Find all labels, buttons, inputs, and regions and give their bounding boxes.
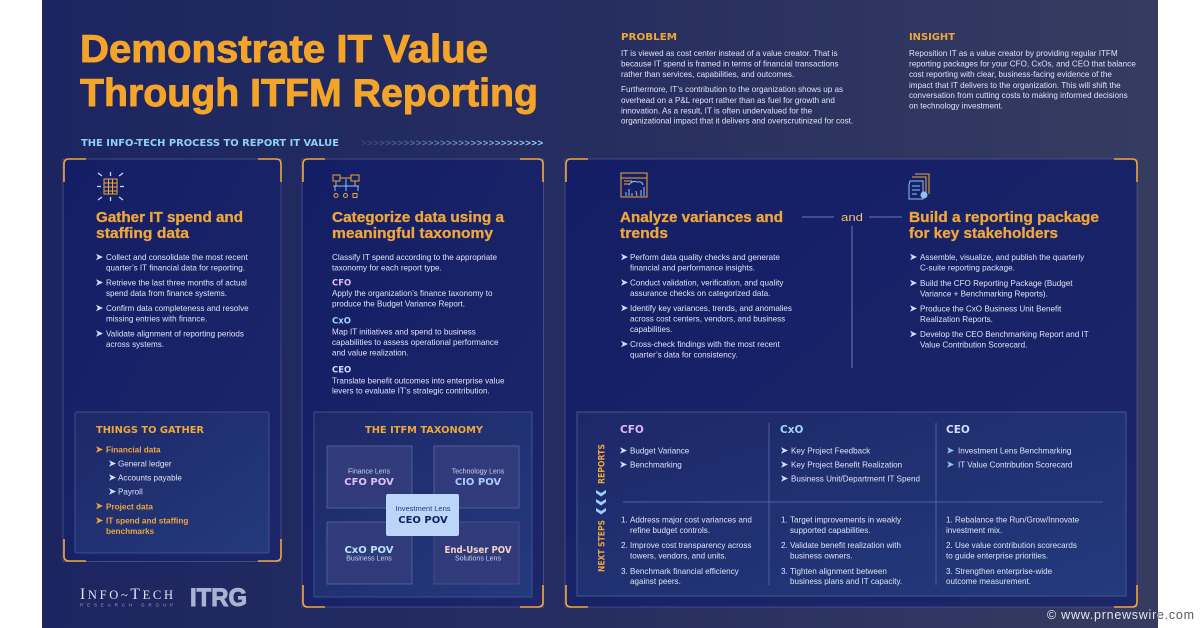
tile: CIO POV	[434, 446, 519, 508]
panel: things to gather: Project data	[106, 502, 153, 512]
problem text block: IT is viewed as cost center instead of a value creator. That is	[621, 49, 838, 58]
panel: things to gather: Accounts payable	[118, 474, 182, 482]
bullet list: build: Variance + Benchmarking Reports).	[920, 290, 1048, 298]
icon: document stack	[909, 174, 929, 199]
insight text block: reporting packages for your CFO, CxOs, and CEO that balance	[909, 60, 1136, 68]
taxonomy description: capabilities to assess operational performance	[332, 338, 499, 347]
title: Through ITFM Reporting	[80, 72, 538, 115]
bullet list: analyze	[621, 253, 792, 360]
tile: CxO POV: CxO POV	[344, 545, 394, 556]
bullet list: build: Produce the CxO Business Unit Benefit	[920, 304, 1062, 314]
column: CFO: Address major cost variances and	[630, 516, 752, 524]
column: CxO: 1.	[781, 516, 788, 524]
insight text block: impact that IT delivers to the organization. This will shift the	[909, 81, 1121, 90]
logo: Info-Tech Research Group: RESEARCH GROUP	[80, 602, 173, 608]
bullet list: analyze: Perform data quality checks and generate	[630, 253, 780, 262]
problem text block: organizational impact that it delivers and overscrutinized for cost.	[621, 116, 853, 126]
title: Demonstrate IT Value	[80, 28, 488, 71]
panel: things to gather: benchmarks	[106, 527, 155, 536]
column: CFO: CFO	[620, 424, 644, 436]
column: CFO: Benchmarking	[630, 460, 682, 470]
process subtitle with arrow trail: >>>>>>>>>>>>>>>>>>>>>>>>>>>>>>	[361, 138, 543, 149]
heading: analyze	[620, 210, 783, 242]
heading: analyze: trends	[620, 226, 668, 242]
bullet list: across systems.	[106, 340, 164, 349]
bullet list: analyze: capabilities.	[630, 325, 672, 334]
bullet list: analyze: Cross-check findings with the most recent	[630, 340, 781, 349]
tile: CFO POV: Finance Lens	[348, 468, 391, 476]
side label: next steps: NEXT STEPS	[598, 520, 608, 572]
insight text block: Reposition IT as a value creator by providing regular ITFM	[909, 49, 1118, 58]
panel: things to gather: IT spend and staffing	[106, 516, 188, 526]
taxonomy description: Map IT initiatives and spend to business	[332, 328, 476, 336]
column: CEO: to guide enterprise priorities.	[946, 552, 1048, 560]
insight text block: cost reporting with clear, business-facing evidence of the	[909, 70, 1112, 79]
taxonomy description	[332, 253, 505, 396]
bullet list: build: Build the CFO Reporting Package (Budget	[920, 279, 1073, 288]
taxonomy description: levers to evaluate IT’s strategic contribution.	[332, 386, 490, 396]
icon: data table with arrows	[97, 172, 124, 201]
column: CxO	[780, 424, 920, 586]
icon: taxonomy tree	[333, 175, 359, 198]
tile: CEO POV	[386, 494, 459, 536]
problem text block: rather than services, capabilities, and outcomes.	[621, 70, 794, 79]
bullet list: quarter’s IT financial data for reporting.	[106, 264, 245, 272]
column: CxO: supported capabilities.	[790, 526, 871, 535]
arrows: reports to next steps	[596, 490, 606, 514]
bullet list: spend data from finance systems.	[106, 289, 227, 298]
heading	[332, 210, 505, 242]
column: CxO: Validate benefit realization with	[790, 541, 901, 550]
taxonomy description: CxO	[332, 316, 351, 326]
column: CxO: Key Project Feedback	[791, 446, 871, 456]
problem text block	[621, 32, 853, 126]
column: CxO: business plans and IT capacity.	[790, 577, 902, 586]
connector: and: and	[841, 212, 863, 224]
problem text block: PROBLEM	[621, 32, 677, 43]
tile: CFO POV	[327, 446, 412, 508]
process subtitle with arrow trail: THE INFO-TECH PROCESS TO REPORT IT VALUE	[81, 138, 339, 149]
bullet list: analyze: assurance checks on categorized data.	[630, 289, 770, 298]
column: CFO: Budget Variance	[630, 446, 690, 456]
panel: things to gather: Payroll	[118, 488, 143, 496]
panel: the ITFM taxonomy: THE ITFM TAXONOMY	[365, 425, 483, 436]
problem text block: Furthermore, IT’s contribution to the organization shows up as	[621, 85, 843, 94]
heading	[96, 210, 243, 242]
taxonomy description: taxonomy for each report type.	[332, 264, 442, 272]
column: CFO: refine budget controls.	[630, 526, 710, 535]
bullet list: Validate alignment of reporting periods	[106, 330, 244, 338]
tile: End-User POV: Solutions Lens	[455, 556, 501, 562]
heading: Categorize data using a	[332, 210, 505, 226]
column: CEO: IT Value Contribution Scorecard	[958, 460, 1072, 470]
panel: things to gather: Financial data	[106, 446, 161, 454]
panel: categorize	[302, 159, 544, 607]
column: CFO	[620, 424, 752, 586]
taxonomy description: Classify IT spend according to the appropriate	[332, 253, 497, 262]
heading: build: Build a reporting package	[909, 210, 1099, 226]
logo: Info-Tech Research Group: INFO~TECH	[80, 586, 173, 603]
problem text block: because IT spend is framed in terms of financial transactions	[621, 60, 839, 68]
connector: and	[802, 212, 902, 368]
panel: things to gather: General ledger	[118, 460, 172, 468]
bullet list: analyze: quarter’s data for consistency.	[630, 350, 738, 360]
column: CxO: Target improvements in weakly	[790, 516, 902, 524]
column: CEO: outcome measurement.	[946, 577, 1031, 586]
column: CFO: against peers.	[630, 577, 681, 586]
tile: CxO POV	[327, 522, 412, 584]
panel: the ITFM taxonomy	[314, 412, 532, 597]
bullet list: Confirm data completeness and resolve	[106, 304, 249, 313]
taxonomy description: CFO	[332, 278, 351, 288]
heading: analyze: Analyze variances and	[620, 210, 783, 226]
bullet list: missing entries with finance.	[106, 314, 207, 324]
column: CFO: 3.	[621, 567, 628, 576]
bullet list: build: Value Contribution Scorecard.	[920, 340, 1027, 350]
insight text block: conversation from cutting costs to making informed decisions	[909, 91, 1128, 100]
column: CEO: CEO	[946, 424, 970, 436]
column: CFO: Improve cost transparency across	[630, 541, 751, 550]
title	[80, 28, 538, 115]
tile: CIO POV: Technology Lens	[452, 468, 505, 476]
heading: Gather IT spend and	[96, 210, 243, 226]
bullet list: build: Realization Reports.	[920, 315, 993, 324]
column: CFO: 2.	[621, 541, 628, 550]
taxonomy description: Translate benefit outcomes into enterprise value	[332, 376, 505, 386]
problem text block: innovation. As a result, IT is often undervalued for the	[621, 106, 813, 116]
heading: build: for key stakeholders	[909, 226, 1058, 242]
bullet list: Retrieve the last three months of actual	[106, 278, 247, 288]
bullet list: analyze: financial and performance insights.	[630, 264, 755, 272]
insight text block: INSIGHT	[909, 32, 955, 43]
tile: CxO POV: Business Lens	[346, 556, 392, 562]
tile: CFO POV: CFO POV	[344, 477, 394, 488]
tile: CIO POV: CIO POV	[455, 477, 501, 488]
column: CxO: Tighten alignment between	[790, 567, 887, 576]
bullet list: build: Develop the CEO Benchmarking Report and IT	[920, 330, 1089, 339]
column: CxO: 2.	[781, 541, 788, 550]
heading: meaningful taxonomy	[332, 226, 493, 242]
panel: reports and next steps	[577, 412, 1126, 596]
taxonomy description: Apply the organization’s finance taxonomy to	[332, 289, 493, 298]
column: CFO: 1.	[621, 516, 628, 524]
icon: analysis chart	[621, 173, 647, 197]
column: CEO	[946, 424, 1080, 586]
bullet list: analyze: Identify key variances, trends, and anomalies	[630, 304, 792, 313]
column: CxO: Key Project Benefit Realization	[791, 460, 902, 470]
watermark: © www.prnewswire.com	[1047, 608, 1194, 622]
bullet list: Collect and consolidate the most recent	[106, 253, 248, 262]
insight text block: on technology investment.	[909, 102, 1003, 110]
column: CEO: investment mix.	[946, 526, 1002, 535]
column: CEO: 2. Use value contribution scorecards	[946, 541, 1077, 550]
side label: reports: REPORTS	[598, 444, 608, 484]
taxonomy description: and value realization.	[332, 348, 408, 358]
tile: CEO POV: Investment Lens	[395, 504, 451, 513]
insight text block	[909, 32, 1136, 110]
column: CEO: 3. Strengthen enterprise-wide	[946, 567, 1053, 576]
heading: build	[909, 210, 1099, 242]
bullet list	[96, 253, 249, 349]
column: CEO: 1. Rebalance the Run/Grow/Innovate	[946, 516, 1080, 524]
column: CFO: towers, vendors, and units.	[630, 552, 727, 560]
bullet list: build: Assemble, visualize, and publish the quarterly	[920, 253, 1085, 262]
bullet list: analyze: across cost centers, vendors, and business	[630, 314, 785, 324]
process subtitle with arrow trail	[81, 138, 543, 149]
tile: End-User POV: End-User POV	[444, 545, 512, 556]
panel: things to gather: THINGS TO GATHER	[96, 425, 205, 436]
panel: analyze and build	[565, 159, 1137, 607]
taxonomy description: produce the Budget Variance Report.	[332, 300, 465, 308]
column: CxO: 3.	[781, 567, 788, 576]
problem text block: overhead on a P&L report rather than as fuel for growth and	[621, 96, 835, 105]
tile: CEO POV: CEO POV	[398, 515, 448, 526]
tile: End-User POV	[434, 522, 519, 584]
logo: ITRG: ITRG	[190, 584, 247, 612]
column: CFO: Benchmark financial efficiency	[630, 567, 740, 576]
bullet list: build: C-suite reporting package.	[920, 264, 1015, 272]
bullet list: analyze: Conduct validation, verification, and quality	[630, 278, 784, 288]
column: CxO: CxO	[780, 424, 803, 436]
panel: things to gather	[75, 412, 269, 553]
heading: staffing data	[96, 226, 190, 242]
panel: gather	[63, 159, 281, 562]
column: CxO: Business Unit/Department IT Spend	[791, 474, 920, 484]
taxonomy description: CEO	[332, 366, 351, 376]
column: CxO: business owners.	[790, 552, 853, 560]
bullet list: build	[910, 253, 1089, 350]
column: CEO: Investment Lens Benchmarking	[958, 446, 1071, 456]
